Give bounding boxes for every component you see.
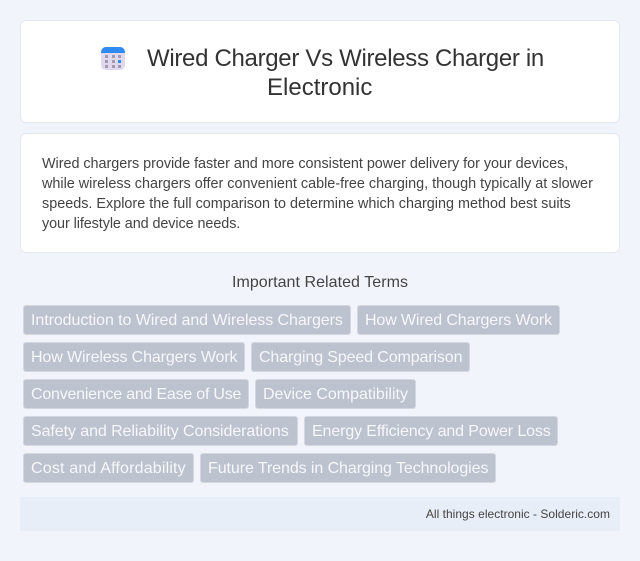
tag xyxy=(23,416,298,446)
tag xyxy=(255,379,416,409)
tag xyxy=(251,342,470,372)
tag xyxy=(357,305,560,335)
tag xyxy=(23,453,194,483)
related terms tags xyxy=(23,305,560,483)
tag: How Wireless Chargers Work xyxy=(31,349,237,366)
footer text: All things electronic - Solderic.com xyxy=(426,507,610,521)
tag: Device Compatibility xyxy=(263,386,408,403)
description text xyxy=(42,156,593,232)
title: Electronic xyxy=(267,74,372,101)
icon: calendar xyxy=(101,47,125,70)
tag xyxy=(304,416,558,446)
title: Wired Charger Vs Wireless Charger in xyxy=(147,45,544,72)
tag: Introduction to Wired and Wireless Chargers xyxy=(31,312,343,329)
description text: speeds. Explore the full comparison to determine which charging method best suits xyxy=(42,196,571,212)
description text: while wireless chargers offer convenient cable-free charging, though typically at slower xyxy=(42,176,593,192)
title card xyxy=(20,20,620,123)
tag: How Wired Chargers Work xyxy=(365,312,552,329)
tag: Convenience and Ease of Use xyxy=(31,386,241,403)
tag: Cost and Affordability xyxy=(31,460,186,477)
related terms heading: Important Related Terms xyxy=(232,274,408,291)
tag: Charging Speed Comparison xyxy=(259,349,462,366)
tag xyxy=(23,379,249,409)
description card xyxy=(20,133,620,253)
title xyxy=(147,45,544,101)
footer bar xyxy=(20,497,620,531)
tag xyxy=(23,342,245,372)
tag xyxy=(23,305,351,335)
tag: Safety and Reliability Considerations xyxy=(31,423,289,440)
tag: Future Trends in Charging Technologies xyxy=(208,460,488,477)
tag: Energy Efficiency and Power Loss xyxy=(312,423,551,440)
description text: your lifestyle and device needs. xyxy=(42,216,240,232)
description text: Wired chargers provide faster and more consistent power delivery for your devices, xyxy=(42,156,568,172)
tag xyxy=(200,453,496,483)
